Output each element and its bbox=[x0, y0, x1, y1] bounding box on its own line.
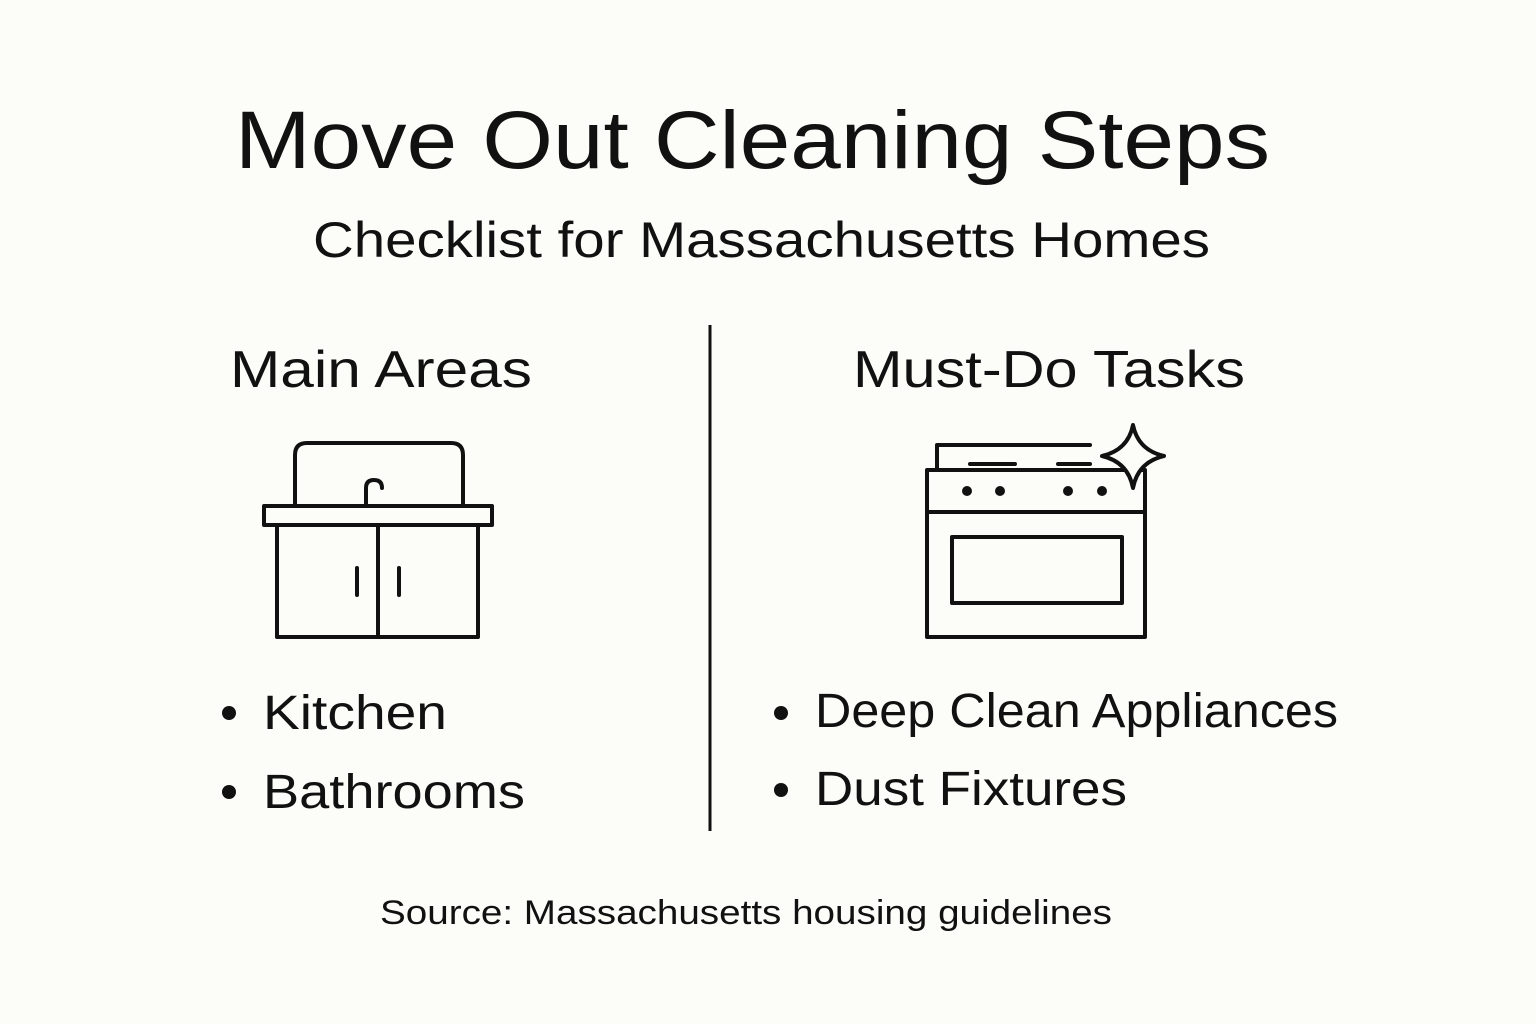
panel: must-do tasks bbox=[774, 341, 1338, 816]
panel: main areas bbox=[222, 341, 532, 819]
icon: stove with sparkle bbox=[927, 425, 1164, 637]
list: tasks bbox=[774, 685, 1338, 816]
heading: must-do tasks: Must-Do Tasks bbox=[853, 341, 1245, 399]
subtitle: Checklist for Massachusetts Homes bbox=[313, 212, 1210, 268]
source note: Source: Massachusetts housing guidelines bbox=[380, 894, 1112, 932]
title: Move Out Cleaning Steps bbox=[235, 95, 1270, 186]
list: tasks: Deep Clean Appliances bbox=[815, 685, 1338, 738]
list: areas: Bathrooms bbox=[263, 766, 525, 819]
icon: kitchen sink bbox=[264, 443, 492, 637]
list: tasks: Dust Fixtures bbox=[815, 763, 1127, 816]
list: areas: Kitchen bbox=[263, 687, 447, 740]
list: areas bbox=[222, 687, 525, 819]
heading: main areas: Main Areas bbox=[230, 341, 532, 399]
